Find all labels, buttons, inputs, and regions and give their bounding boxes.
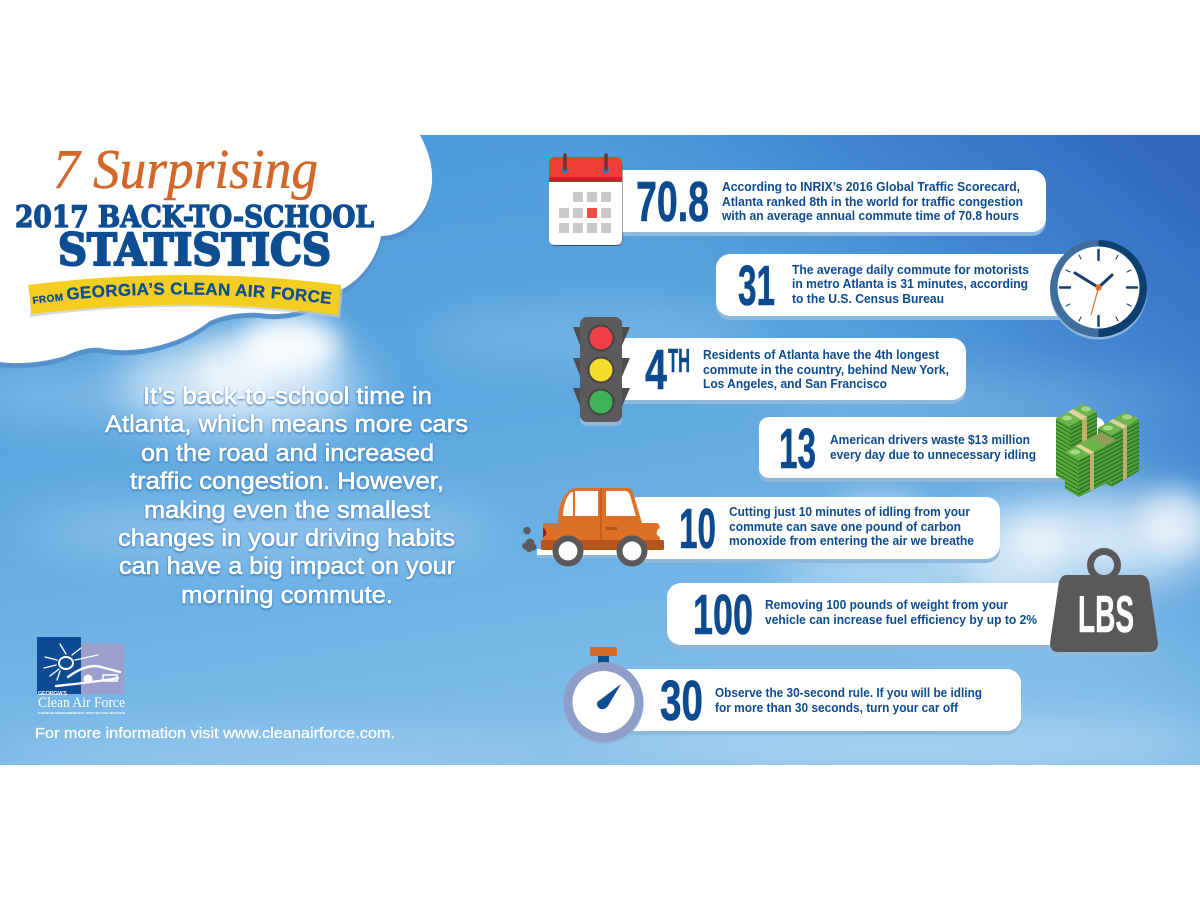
description [830,433,1036,462]
icon: money stacks [1056,404,1139,497]
description: Observe the 30-second rule. If you will be idling [715,686,982,700]
number: 13: 13 [779,417,816,481]
intro paragraph: morning commute. [181,582,393,609]
description [703,348,949,391]
description [729,505,974,548]
description: Atlanta ranked 8th in the world for traffic congestion [722,195,1023,209]
website line: For more information visit www.cleanairforce.com. [35,726,395,742]
front stack [1065,432,1116,497]
logo: Georgia's Clean Air Force: Clean Air Force [38,695,125,711]
description: Cutting just 10 minutes of idling from your [729,505,970,519]
number: 4th: 4 [645,338,667,402]
right stack [1098,412,1139,487]
exhaust puffs [522,527,536,552]
back-left stack [1056,404,1097,484]
icon: LBS weight [1050,552,1158,655]
stat card 4: 13 [759,417,1105,482]
description: monoxide from entering the air we breathe [729,534,974,548]
description [715,686,982,715]
description: The average daily commute for motorists [792,263,1029,277]
stat card 5: 10 [625,497,1000,563]
description: commute in the country, behind New York, [703,363,949,377]
description [792,263,1029,306]
description [765,598,1037,627]
banner: from Georgia's Clean Air Force: FROM GEORGIA’S CLEAN AIR FORCE [32,282,332,304]
stat card 3: 4th [610,338,966,404]
number: 4th: TH [668,342,690,379]
logo: Georgia's Clean Air Force [37,637,125,715]
stat card 2: 31 [716,254,1086,320]
title: 7 Surprising: 7 Surprising [53,139,318,201]
header cloud [0,135,432,368]
description: commute can save one pound of carbon [729,520,961,534]
intro paragraph: Atlanta, which means more cars [105,411,468,438]
intro paragraph: changes in your driving habits [118,525,455,552]
description: According to INRIX’s 2016 Global Traffic Scorecard, [722,180,1020,194]
intro paragraph: on the road and increased [141,440,434,467]
description: with an average annual commute time of 70.8 hours [721,209,1019,223]
icon: car with exhaust [522,488,664,566]
description: vehicle can increase fuel efficiency by up to 2% [765,613,1037,627]
description [721,180,1023,223]
description: Residents of Atlanta have the 4th longest [703,348,940,362]
description: for more than 30 seconds, turn your car off [715,701,959,715]
LBS label: LBS [1078,586,1134,644]
stat card 6: 100 [667,583,1077,649]
icon: stopwatch [564,647,644,744]
number: 70.8: 70.8 [636,170,709,234]
intro paragraph: making even the smallest [144,497,430,524]
stat card 7: 30 [610,669,1021,735]
banner: from Georgia's Clean Air Force [28,275,343,318]
description: in metro Atlanta is 31 minutes, according [792,277,1028,291]
number: 10: 10 [679,497,716,561]
icon: calendar [549,155,622,246]
title: Statistics: STATISTICS [58,225,331,276]
number: 100: 100 [693,583,753,647]
number: 30: 30 [660,669,703,733]
description: to the U.S. Census Bureau [792,292,944,306]
logo: Georgia's Clean Air Force: GEORGIA’S [38,691,67,697]
description: Removing 100 pounds of weight from your [765,598,1008,612]
description: American drivers waste $13 million [830,433,1030,447]
icon: traffic light [573,317,630,426]
intro paragraph [105,383,468,609]
intro paragraph: traffic congestion. However, [130,468,444,495]
description: every day due to unnecessary idling [830,448,1036,462]
white strip under car [537,549,637,558]
intro paragraph: can have a big impact on your [119,553,455,580]
number: 31: 31 [738,254,775,318]
sky background [0,135,1200,771]
intro paragraph: It’s back-to-school time in [143,383,432,410]
stopwatch hand [597,684,621,709]
title: 2017 Back-to-School: 2017 BACK-TO-SCHOOL [15,200,374,235]
logo: Georgia's Clean Air Force: GEORGIA ENVIRONMENTAL PROTECTION DIVISION [38,711,125,715]
stat card 1: 70.8 [600,170,1046,236]
description: Los Angeles, and San Francisco [703,377,887,391]
icon: clock [1050,240,1147,340]
